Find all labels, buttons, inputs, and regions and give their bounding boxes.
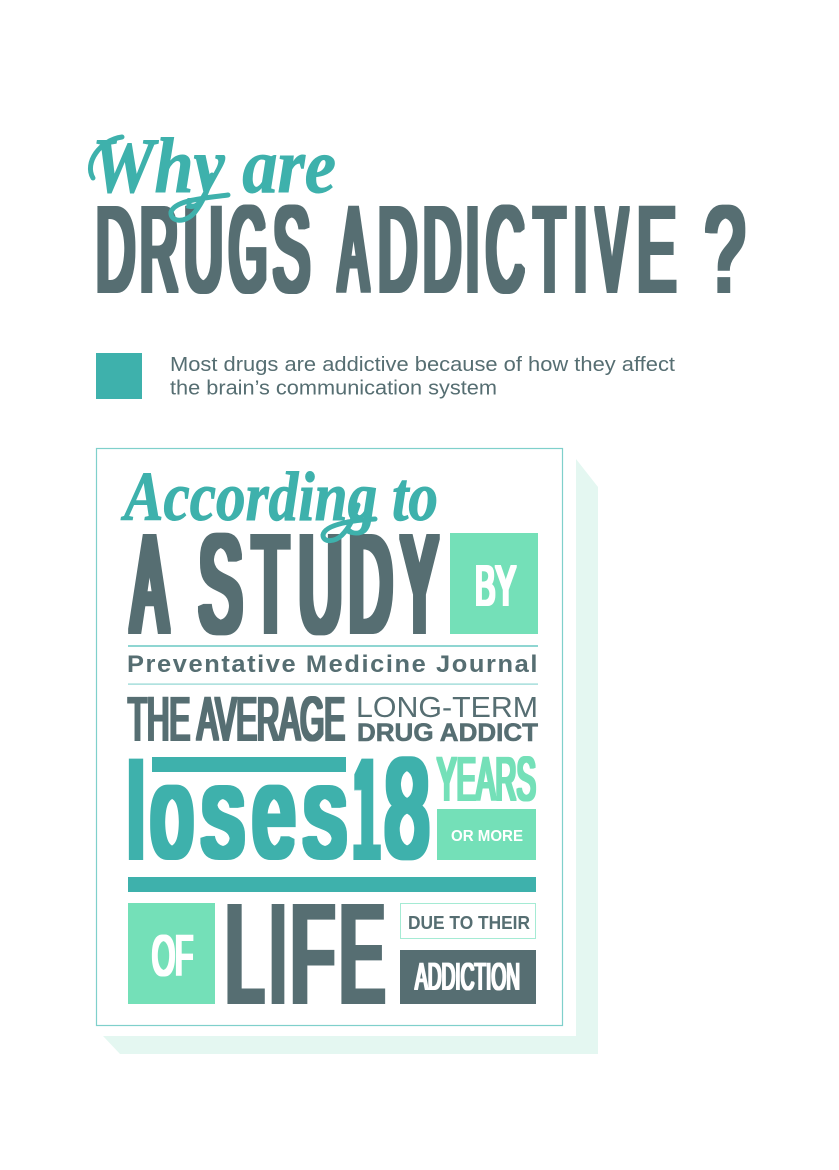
number: 18: 1 xyxy=(354,730,379,888)
headline: drugs addictive: G xyxy=(229,182,267,317)
text: loses: s xyxy=(304,742,346,884)
badge: by: BY xyxy=(475,554,516,618)
badge: or more: OR MORE xyxy=(451,828,523,845)
heading: a study: T xyxy=(253,508,288,662)
headline: drugs addictive: R xyxy=(140,182,178,317)
icon: teal square bullet xyxy=(96,353,142,399)
text: long-term: LONG-TERM xyxy=(356,692,538,724)
number: 18: 8 xyxy=(385,730,429,886)
headline: drugs addictive: D xyxy=(378,182,417,317)
heading: a study: D xyxy=(349,508,392,662)
headline: drugs addictive: ? xyxy=(705,182,745,317)
badge: addiction xyxy=(400,950,536,1004)
text: loses xyxy=(128,738,346,886)
panel: study card xyxy=(96,448,562,1032)
heading: a study: S xyxy=(199,508,242,662)
panel: study card: YEARS xyxy=(437,745,536,813)
badge: of: OF xyxy=(152,924,193,988)
label: due to their xyxy=(400,904,536,938)
headline: drugs addictive: A xyxy=(339,182,368,317)
badge: by xyxy=(450,533,538,634)
badge: of xyxy=(128,903,215,1004)
card shadow xyxy=(103,459,598,1054)
heading: life: I xyxy=(271,878,285,1032)
panel: study card: Y xyxy=(402,508,437,662)
headline: drugs addictive: V xyxy=(597,182,627,317)
heading: a study: U xyxy=(299,508,342,662)
text: the average: THE AVERAGE xyxy=(128,685,345,753)
headline: drugs addictive: I xyxy=(574,182,587,317)
text: loses: l xyxy=(128,738,144,886)
panel: study card: E xyxy=(340,878,384,1032)
text: loses: e xyxy=(253,742,295,884)
card frame xyxy=(96,448,562,1026)
headline: drugs addictive xyxy=(96,182,745,317)
heading: life: L xyxy=(226,878,263,1032)
headline: drugs addictive: C xyxy=(486,182,524,317)
script heading: why are: Why are xyxy=(92,122,336,209)
text: loses: o xyxy=(151,742,193,884)
heading: life xyxy=(226,878,384,1032)
badge: addiction: ADDICTION xyxy=(415,956,520,998)
headline: drugs addictive: I xyxy=(466,182,479,317)
intro text: the brain’s communication system xyxy=(170,378,497,400)
headline: drugs addictive: D xyxy=(423,182,461,317)
text: loses: s xyxy=(202,742,244,884)
headline: drugs addictive: E xyxy=(637,182,676,317)
script heading: according to: According to xyxy=(121,459,438,536)
text: drug addict: DRUG ADDICT xyxy=(357,719,538,747)
badge: or more xyxy=(437,809,536,860)
label: due to their: DUE TO THEIR xyxy=(408,912,530,933)
source: preventative medicine journal: Preventative Medicine Journal xyxy=(127,651,539,678)
headline: drugs addictive: D xyxy=(96,182,135,317)
heading: a study: A xyxy=(132,508,167,662)
headline: drugs addictive: U xyxy=(184,182,223,317)
intro text xyxy=(170,354,675,400)
intro text: Most drugs are addictive because of how they affect xyxy=(170,354,675,376)
heading: a study xyxy=(132,508,437,662)
headline: drugs addictive: T xyxy=(534,182,565,317)
heading: life: F xyxy=(291,878,334,1032)
headline: drugs addictive: S xyxy=(273,182,310,317)
